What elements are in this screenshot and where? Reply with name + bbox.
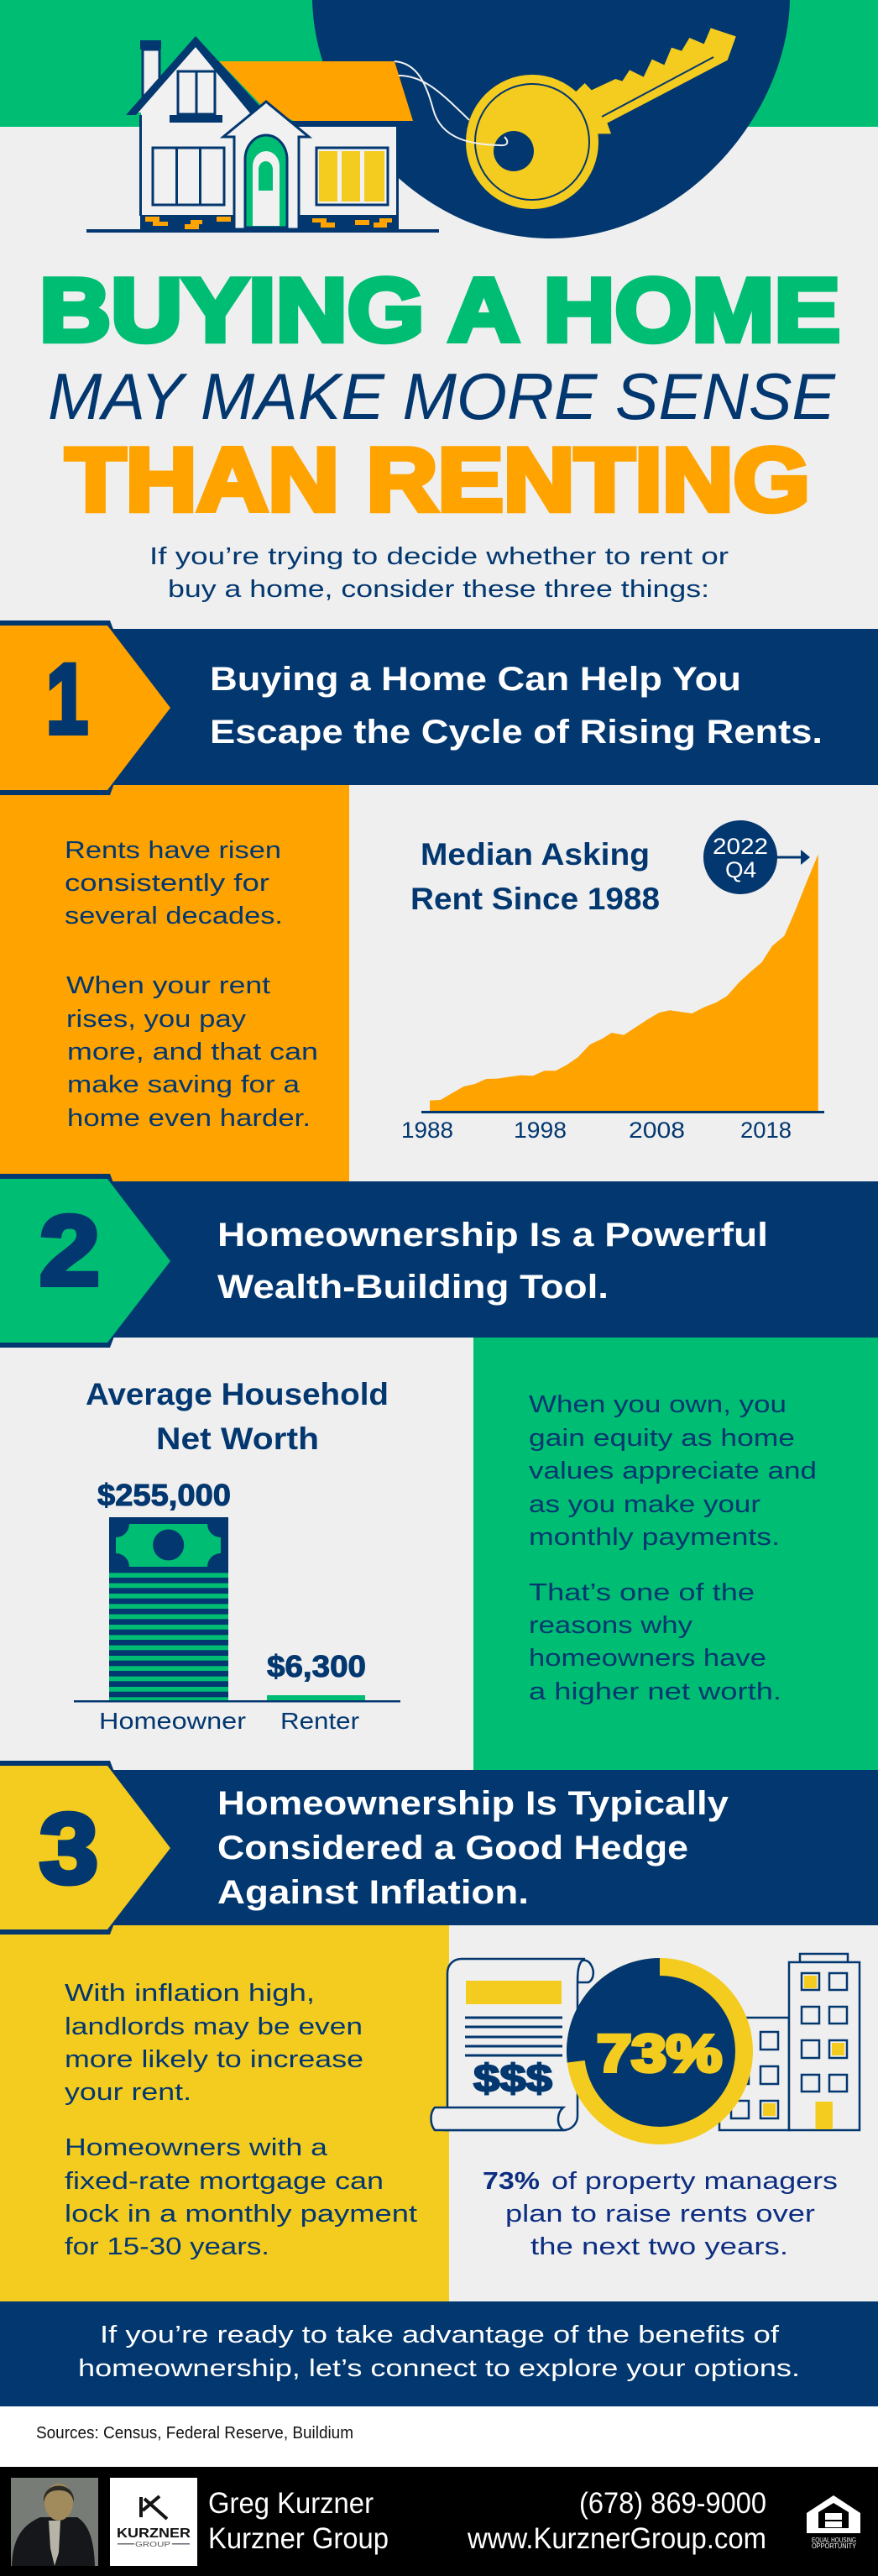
contact details: (678) 869-9000 [579, 2487, 766, 2520]
company logo [110, 2478, 197, 2566]
company logo: KURZNER [117, 2526, 191, 2541]
text block: section 1: Rents have risen [65, 837, 281, 864]
agent name: Kurzner Group [208, 2522, 389, 2555]
banner 3: Against Inflation. [217, 1874, 529, 1911]
text block: section 2 [529, 1391, 817, 1705]
text block: section 2: values appreciate and [529, 1458, 817, 1484]
chart title: Average Household [86, 1377, 389, 1411]
banner 2 [0, 1174, 878, 1348]
value label: homeowner: $255,000 [97, 1478, 231, 1512]
text block: section 2: reasons why [529, 1612, 693, 1639]
axis labels: 2008 [629, 1118, 685, 1143]
text block: section 3: With inflation high, [65, 1980, 315, 2007]
text block: section 1: more, and that can [67, 1039, 318, 1065]
banner 3: Homeownership Is Typically [217, 1785, 729, 1822]
callout: 2022 Q4 [703, 820, 810, 894]
closing banner [0, 2301, 878, 2406]
panel: section 1 text background [0, 785, 349, 1181]
text block: section 2: gain equity as home [529, 1425, 795, 1452]
text block: 73 percent statistic: the next two years. [530, 2233, 788, 2260]
illustration: key [395, 28, 736, 209]
text block: section 1: home even harder. [67, 1105, 311, 1132]
banner 3: Considered a Good Hedge [217, 1830, 688, 1867]
text block: 73 percent statistic: 73% [483, 2168, 540, 2195]
banner 2: 2 [39, 1196, 100, 1306]
sources band [0, 2406, 878, 2467]
contact details [467, 2487, 766, 2555]
closing banner: If you’re ready to take advantage of the benefits of [100, 2322, 780, 2348]
axis labels: 1998 [514, 1118, 567, 1143]
text block: section 2: as you make your [529, 1491, 760, 1518]
category labels [99, 1708, 359, 1734]
panel: section 3 yellow background [0, 1925, 449, 2301]
footer [0, 2467, 878, 2576]
agent photo [11, 2478, 98, 2566]
text block: section 3: lock in a monthly payment [65, 2201, 417, 2228]
text block: section 3: more likely to increase [65, 2046, 363, 2073]
navy key backdrop [312, 0, 790, 238]
axis labels: 1988 [401, 1118, 453, 1143]
icon: equal housing opportunity: EQUAL HOUSING [812, 2536, 856, 2544]
text block: section 3: Homeowners with a [65, 2134, 328, 2161]
text block: section 2: When you own, you [529, 1391, 787, 1418]
banner 3 [0, 1761, 878, 1935]
agent name [208, 2487, 389, 2555]
closing banner: homeownership, let’s connect to explore your options. [78, 2355, 800, 2382]
icon: lease scroll: $$$ [473, 2056, 552, 2100]
contact details: www.KurznerGroup.com [467, 2522, 766, 2555]
text block: section 3: your rent. [65, 2079, 191, 2106]
text block: section 1: rises, you pay [66, 1006, 247, 1033]
bar: homeowner money stack [109, 1517, 228, 1701]
text block: section 1: When your rent [66, 972, 270, 999]
category labels: Homeowner [99, 1708, 246, 1734]
intro text [149, 543, 729, 603]
category labels: Renter [280, 1708, 359, 1734]
banner 2: Homeownership Is a Powerful [217, 1217, 768, 1254]
text block: section 3 [65, 1980, 417, 2260]
chart title: Rent Since 1988 [410, 882, 660, 916]
chart: 73 percent donut [567, 1958, 753, 2144]
title: BUYING A HOME [39, 259, 840, 360]
text block: 73 percent statistic: plan to raise rents over [505, 2201, 815, 2228]
text block: section 2: That’s one of the [529, 1579, 755, 1606]
banner 1: 1 [46, 644, 88, 755]
text block: section 3: landlords may be even [65, 2013, 363, 2040]
text block: section 3: fixed-rate mortgage can [65, 2168, 384, 2195]
icon: apartment buildings [719, 1954, 860, 2130]
title: MAY MAKE MORE SENSE [48, 359, 836, 433]
chart: median asking rent [401, 820, 824, 1143]
chart title [86, 1377, 389, 1456]
chart title: Net Worth [156, 1422, 319, 1456]
panel: section 2 green background [473, 1338, 878, 1770]
agent name: Greg Kurzner [208, 2487, 374, 2520]
text block: section 3: for 15-30 years. [65, 2233, 269, 2260]
text block: 73 percent statistic: of property managers [551, 2168, 838, 2195]
banner 3: 3 [39, 1793, 98, 1904]
banner 2: Wealth-Building Tool. [217, 1269, 609, 1306]
callout: 2022 Q4: Q4 [725, 857, 756, 882]
text block: section 1 [65, 837, 318, 1132]
banner 1: Escape the Cycle of Rising Rents. [210, 714, 823, 751]
chart title: Median Asking [421, 837, 650, 872]
illustration: house [86, 36, 439, 233]
text block: section 1: consistently for [65, 870, 269, 897]
text block: section 1: several decades. [65, 903, 283, 929]
header band [0, 0, 878, 127]
banner 1 [0, 620, 878, 795]
bar: renter [267, 1695, 365, 1700]
text block: section 2: a higher net worth. [529, 1678, 781, 1705]
axis labels: 2018 [740, 1118, 792, 1143]
icon: lease scroll [431, 1959, 593, 2130]
text block: section 1: make saving for a [67, 1071, 301, 1098]
icon: equal housing opportunity [807, 2495, 860, 2550]
area series [430, 854, 818, 1111]
text block: section 2: monthly payments. [529, 1524, 780, 1551]
company logo: GROUP [135, 2541, 170, 2548]
sources band: Sources: Census, Federal Reserve, Buildium [36, 2424, 353, 2442]
text block: 73 percent statistic [483, 2168, 838, 2260]
chart: average household net worth [74, 1377, 400, 1734]
callout: 2022 Q4: 2022 [713, 834, 768, 859]
title: THAN RENTING [65, 429, 810, 530]
icon: equal housing opportunity: OPPORTUNITY [812, 2542, 856, 2550]
value label: renter: $6,300 [267, 1649, 366, 1683]
title [39, 259, 840, 530]
chart title [410, 837, 660, 916]
banner 1: Buying a Home Can Help You [210, 661, 741, 698]
axis labels [401, 1118, 792, 1143]
intro text: buy a home, consider these three things: [168, 576, 709, 603]
intro text: If you’re trying to decide whether to rent or [149, 543, 729, 570]
chart: 73 percent donut: 73% [597, 2025, 722, 2083]
text block: section 2: homeowners have [529, 1645, 766, 1672]
